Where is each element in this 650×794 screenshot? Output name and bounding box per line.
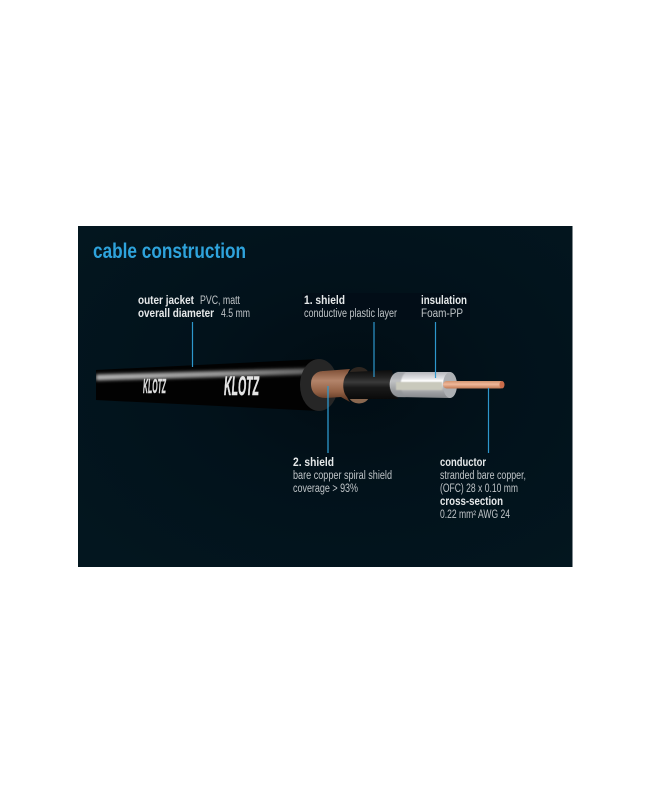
spiral wires: bottom, copper xyxy=(349,388,369,404)
copper spiral shield xyxy=(311,369,350,402)
braid strip xyxy=(396,382,442,390)
text: insulation xyxy=(421,295,467,320)
insulation shaded left edge xyxy=(390,372,406,397)
text: conductor xyxy=(440,457,526,521)
leader line: insulation xyxy=(434,322,436,378)
label band: shield and insulation xyxy=(302,293,470,320)
text: 2. shield: coverage > 93% xyxy=(293,483,358,495)
title: cable construction xyxy=(93,240,246,263)
text: conductor: cross-section xyxy=(440,496,503,508)
cable illustration: KLOTZ xyxy=(143,376,166,398)
cable illustration xyxy=(96,359,504,411)
leader line: conductor xyxy=(488,388,490,453)
text: 2. shield: bare copper spiral shield xyxy=(293,470,392,482)
text: 2. shield: 2. shield xyxy=(293,457,334,469)
text: 1. shield: 1. shield xyxy=(304,295,345,307)
cable illustration: KLOTZ xyxy=(224,371,260,401)
conductor xyxy=(443,381,504,388)
text: outer jacket: PVC, matt xyxy=(200,295,241,307)
leader line: outer jacket xyxy=(192,322,194,367)
foam insulation xyxy=(390,372,457,398)
outer jacket xyxy=(96,359,320,411)
text: conductor: conductor xyxy=(440,457,486,469)
leader line: 1. shield xyxy=(373,322,375,377)
text: insulation: insulation xyxy=(421,295,467,307)
jacket end cap xyxy=(300,359,338,411)
text: 1. shield xyxy=(304,295,397,320)
conductor tip xyxy=(500,381,504,388)
text: outer jacket: outer jacket xyxy=(138,295,194,307)
text: outer jacket: overall diameter xyxy=(138,308,214,320)
conductive plastic layer xyxy=(343,370,398,399)
text: outer jacket: 4.5 mm xyxy=(221,308,250,320)
text: conductor: 0.22 mm² AWG 24 xyxy=(440,509,510,521)
text: insulation: Foam-PP xyxy=(421,308,463,320)
panel: cable construction background xyxy=(78,226,572,567)
text: 2. shield xyxy=(293,457,392,495)
spiral wires: top, dark xyxy=(349,367,369,383)
leader line: 2. shield xyxy=(327,386,329,453)
insulation end face xyxy=(443,372,457,398)
text: 1. shield: conductive plastic layer xyxy=(304,308,397,320)
text: conductor: (OFC) 28 x 0.10 mm xyxy=(440,483,518,495)
text: conductor: stranded bare copper, xyxy=(440,470,526,482)
text: outer jacket xyxy=(138,295,250,320)
